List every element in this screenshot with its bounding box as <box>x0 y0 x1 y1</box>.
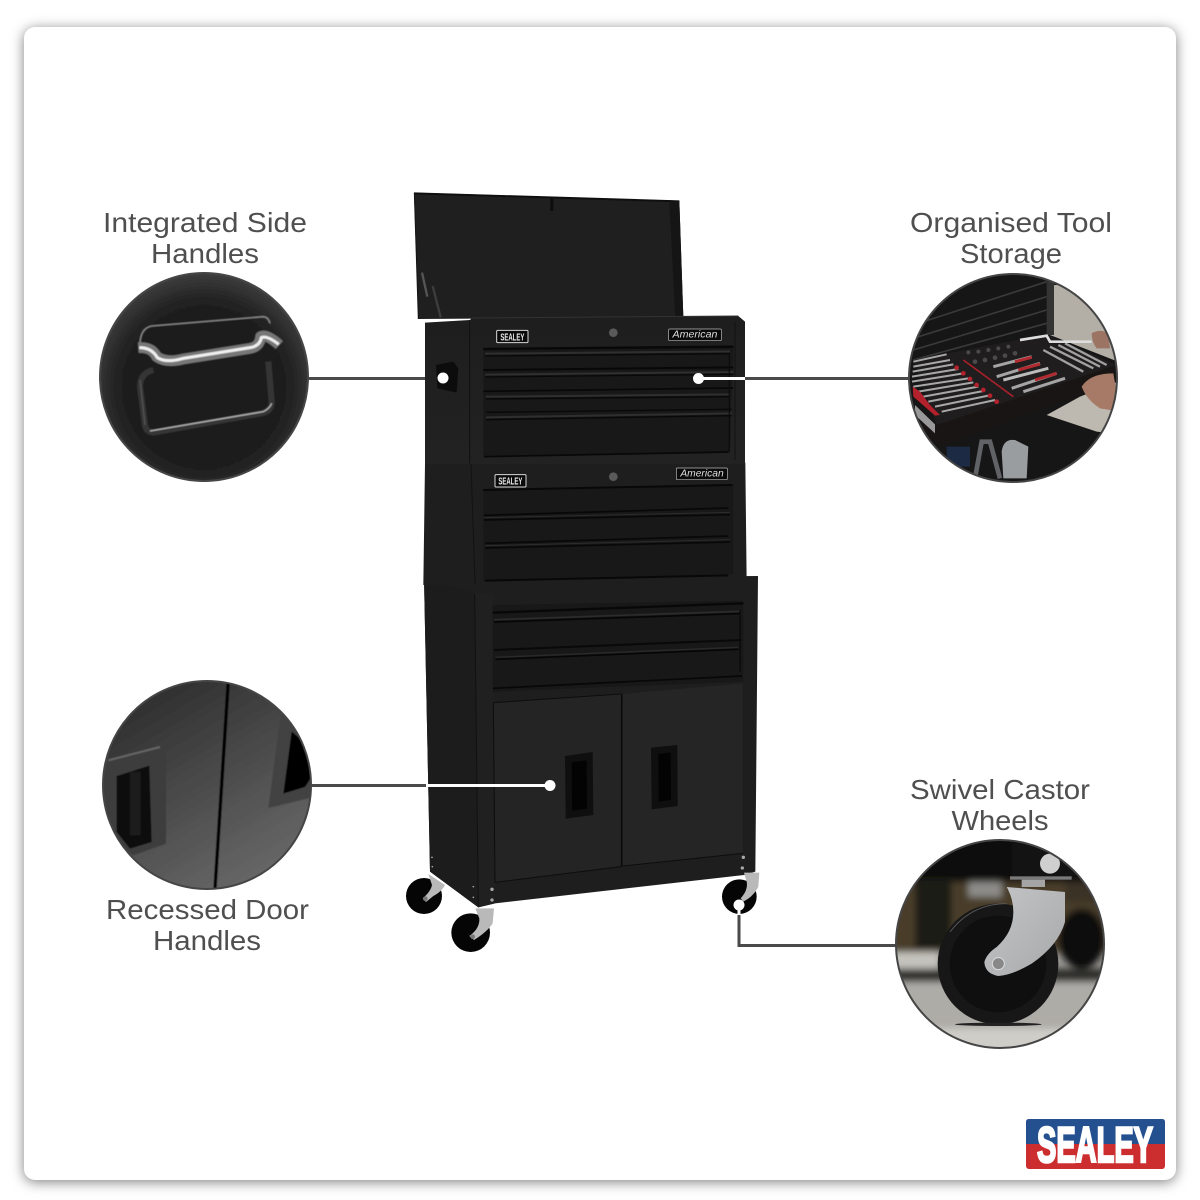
castor: rear left <box>406 874 445 914</box>
heading: Swivel Castor Wheels <box>910 774 1090 836</box>
heading: Organised Tool Storage: Organised Tool <box>910 207 1112 238</box>
heading: Swivel Castor Wheels: Wheels <box>952 805 1048 836</box>
base drawers <box>493 601 743 692</box>
blurred background <box>897 841 1103 1047</box>
connector: castor <box>734 900 897 946</box>
heading: Organised Tool Storage: Storage <box>960 238 1062 269</box>
silver bracket <box>984 887 1065 976</box>
photo circle: recessed door handles <box>102 680 312 890</box>
badge: SEALEY top chest: SEALEY <box>500 332 525 343</box>
badge: SEALEY middle chest <box>495 475 526 488</box>
heading: Recessed Door Handles: Recessed Door <box>106 894 309 925</box>
lock middle chest <box>609 472 618 481</box>
tool chest product <box>406 193 759 952</box>
heading: Integrated Side Handles: Handles <box>151 238 259 269</box>
cabinet right door <box>622 683 743 867</box>
connector dot: side handles <box>438 372 448 384</box>
wheel <box>938 904 1058 1024</box>
badge: American Pro top chest: American <box>671 330 718 341</box>
castor: front left <box>451 908 494 952</box>
stacked drawers behind <box>913 282 1047 360</box>
heading: Integrated Side Handles <box>103 207 307 269</box>
drawer tray <box>913 334 1117 425</box>
red divider <box>963 360 1013 397</box>
lock top chest <box>609 328 618 337</box>
wrench rows <box>912 354 995 412</box>
connector: side handles <box>309 377 443 380</box>
photo circle: swivel castor wheel <box>895 839 1105 1049</box>
frame and bolt <box>1012 839 1092 877</box>
side handle on chest <box>436 362 458 393</box>
rivets <box>431 856 745 902</box>
photo circle: organised tool storage <box>908 273 1118 483</box>
connector: organised storage <box>693 373 909 384</box>
open lid <box>414 193 683 319</box>
badge: SEALEY middle chest: SEALEY <box>498 477 523 488</box>
right wrenches <box>1043 343 1107 372</box>
heading: Recessed Door Handles <box>106 894 309 956</box>
middle chest <box>423 463 747 585</box>
heading: Organised Tool Storage <box>910 207 1112 269</box>
cabinet left door <box>493 694 621 882</box>
heading: Recessed Door Handles: Handles <box>153 925 261 956</box>
connector: recessed door <box>312 780 556 791</box>
socket tools <box>966 345 1017 364</box>
items under drawer <box>1002 440 1028 478</box>
heading: Swivel Castor Wheels: Swivel Castor <box>910 774 1090 805</box>
lower base cabinet <box>406 576 759 952</box>
castor: front right <box>722 873 759 914</box>
marble background <box>1050 285 1114 360</box>
hands <box>1092 331 1110 348</box>
heading: Integrated Side Handles: Integrated Side <box>103 207 307 238</box>
badge: SEALEY top chest <box>497 330 528 343</box>
badge: American Pro middle chest: American <box>679 469 724 480</box>
photo circle: side handle <box>100 273 308 481</box>
top chest <box>425 316 745 464</box>
